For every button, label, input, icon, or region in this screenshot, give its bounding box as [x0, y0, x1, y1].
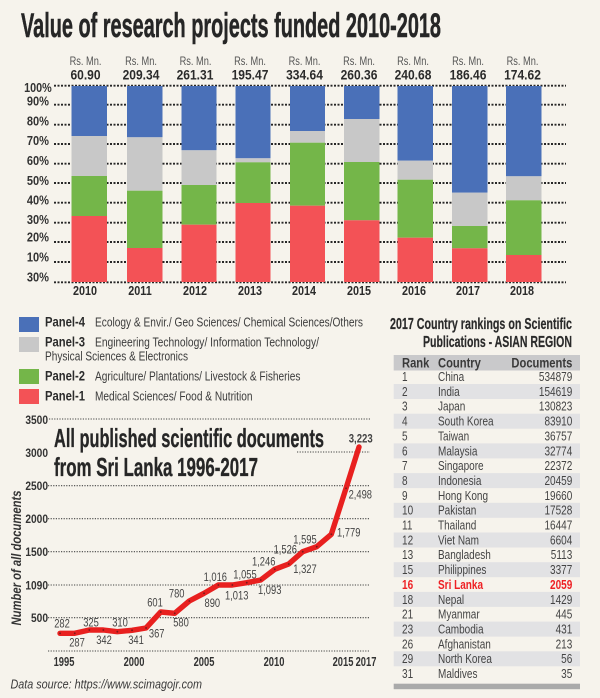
bar 2010: Rs. Mn.	[70, 55, 101, 68]
rankings table: 6	[402, 444, 408, 459]
rankings table: 11	[402, 518, 412, 533]
rankings table: 213	[556, 637, 572, 652]
legend: panel 4: Ecology & Envir./ Geo Sciences/ Chemical Sciences/Others	[95, 316, 363, 330]
rankings table: Nepal	[438, 593, 464, 607]
rankings table: Maldives	[438, 667, 478, 681]
legend: panel 1	[19, 389, 253, 404]
rankings table: Taiwan	[438, 429, 469, 444]
rankings table: 18	[402, 593, 413, 607]
rankings table: 5113	[551, 548, 572, 563]
rankings table: Malaysia	[438, 444, 478, 459]
highlighted row: Sri Lanka	[402, 578, 573, 592]
bar 2011: Rs. Mn.	[125, 55, 157, 68]
legend: panel 4	[19, 315, 363, 332]
rankings table: 3	[402, 399, 408, 414]
bar 2015	[341, 55, 380, 298]
y axis percentage labels: 70%	[27, 133, 49, 148]
rankings table: 20459	[544, 474, 572, 488]
rankings table heading	[390, 316, 572, 351]
bar 2013: 195.47	[232, 67, 268, 83]
rankings table: 15	[402, 563, 413, 577]
bar 2018: Rs. Mn.	[507, 55, 538, 68]
rankings table: Cambodia	[438, 622, 484, 637]
rankings table: 26	[402, 637, 413, 652]
rankings table: Thailand	[438, 518, 476, 533]
rankings table: 17528	[544, 503, 572, 518]
data point labels	[54, 433, 373, 650]
rankings table: Philippines	[438, 563, 487, 577]
data point labels: 1,055	[233, 568, 257, 582]
table header: Documents	[511, 355, 572, 371]
rankings table: 31	[402, 667, 413, 681]
legend: panel 1: Panel-1	[45, 389, 85, 404]
stacked bar chart: research funding by panel	[24, 55, 566, 298]
bar 2015: Rs. Mn.	[343, 55, 375, 68]
rankings table: South Korea	[438, 414, 494, 429]
y axis percentage labels: 30%	[27, 212, 49, 227]
rankings table: 29	[402, 652, 413, 667]
y axis percentage labels: 60%	[27, 153, 49, 168]
data point labels: 2,498	[349, 489, 372, 502]
rankings table: 23	[402, 622, 413, 637]
rankings table: 130823	[539, 399, 572, 414]
rankings table: 7	[402, 459, 408, 473]
rankings table: 5	[402, 429, 408, 444]
legend: panel 2: Panel-2	[45, 369, 85, 384]
bar 2014	[286, 55, 325, 298]
rankings table: 4	[402, 414, 408, 429]
bar 2013	[232, 55, 270, 298]
highlighted row: Sri Lanka: Sri Lanka	[438, 578, 484, 592]
table header: Country	[438, 355, 481, 371]
bar 2014: 334.64	[286, 67, 324, 83]
highlighted row: Sri Lanka: 2059	[550, 578, 573, 592]
rankings table: Afghanistan	[438, 637, 491, 652]
data point labels: 1,595	[293, 533, 317, 547]
highlighted row: Sri Lanka: 16	[402, 578, 414, 592]
bar 2013: Rs. Mn.	[234, 55, 266, 68]
data point labels: 282	[54, 618, 70, 631]
rankings table: Pakistan	[438, 503, 476, 518]
legend: panel 1: Medical Sciences/ Food & Nutrition	[95, 390, 253, 404]
data point labels: 580	[173, 617, 189, 630]
bar 2018: 174.62	[504, 67, 541, 83]
bar 2016: Rs. Mn.	[397, 55, 429, 68]
bar 2012: 261.31	[177, 67, 213, 83]
x axis year labels: 2017	[356, 656, 376, 669]
rankings table: 8	[402, 474, 408, 488]
data point labels: 890	[204, 597, 220, 610]
rankings table: 431	[556, 622, 572, 637]
y axis tick labels: 2500	[25, 480, 48, 493]
rankings table: 83910	[544, 414, 572, 429]
rankings table: China	[438, 370, 465, 384]
y axis percentage labels: 50%	[27, 173, 49, 188]
red data line	[60, 447, 359, 633]
y axis tick labels: 2000	[25, 513, 48, 526]
y axis percentage labels: 40%	[27, 193, 49, 208]
data point labels: 1,526	[274, 544, 297, 557]
rankings table: 2	[402, 385, 408, 399]
rankings table: 12	[402, 533, 413, 548]
data point labels: 1,779	[337, 527, 360, 540]
bar 2016: 2016	[402, 283, 426, 298]
y axis percentage labels: 20%	[27, 230, 49, 245]
bar 2013: 2013	[238, 283, 262, 298]
bar 2010: 2010	[73, 283, 97, 298]
bar 2015: 260.36	[341, 67, 377, 83]
rankings table: 1	[402, 370, 408, 384]
line chart: published documents	[8, 414, 376, 669]
x axis year labels: 1995	[54, 656, 74, 669]
rankings table: Bangladesh	[438, 548, 491, 563]
legend: panel 2	[19, 369, 300, 384]
table header	[394, 355, 580, 371]
y axis tick labels: 3000	[25, 447, 48, 460]
bar 2016: 240.68	[395, 67, 431, 83]
data point labels: 601	[147, 597, 163, 610]
rankings table: Hong Kong	[438, 489, 488, 503]
rankings table: 154619	[539, 385, 572, 399]
data point labels: 1,246	[252, 556, 275, 569]
data point labels: 287	[69, 637, 85, 650]
chart title	[54, 423, 324, 482]
bar 2014: 2014	[292, 283, 316, 298]
y axis percentage labels: 80%	[27, 114, 49, 129]
y axis percentage labels: 100%	[24, 80, 52, 95]
rankings table: 19660	[544, 489, 572, 503]
bar 2015: 2015	[347, 283, 371, 298]
bar 2012: 2012	[183, 283, 207, 298]
data point labels: 367	[149, 628, 165, 641]
chart title: All published scientific documents	[54, 423, 324, 453]
y axis tick labels: 500	[31, 612, 48, 625]
rankings table: Myanmar	[438, 607, 480, 622]
y axis percentage labels: 30%	[27, 270, 49, 285]
bar 2010: 60.90	[70, 67, 101, 83]
rankings table	[394, 355, 580, 689]
legend: panel 3: Panel-3	[45, 335, 85, 350]
rankings table: 6604	[550, 533, 573, 548]
y axis tick labels: 1500	[25, 546, 48, 559]
bar 2018: 2018	[510, 283, 534, 298]
table header: Rank	[402, 355, 430, 371]
y axis tick labels: 1090	[25, 580, 48, 593]
y axis percentage labels: 90%	[27, 94, 49, 109]
rankings table: 534879	[539, 370, 572, 384]
bar 2011: 209.34	[123, 67, 160, 83]
bar 2017: 186.46	[450, 67, 486, 83]
legend: panel 3: Engineering Technology/ Information Technology/	[95, 336, 319, 350]
bar 2011	[123, 55, 162, 298]
data point labels: 341	[128, 634, 144, 647]
legend: panel 3	[19, 335, 319, 364]
bar 2017: Rs. Mn.	[452, 55, 484, 68]
bar 2011: 2011	[128, 283, 152, 298]
bar 2012: Rs. Mn.	[180, 55, 211, 68]
rankings table: 56	[561, 652, 572, 667]
data point labels: 325	[83, 617, 99, 630]
data point labels: 1,093	[258, 584, 281, 597]
rankings table: 1429	[550, 593, 572, 607]
bar 2018	[504, 55, 542, 298]
data point labels: 1,013	[225, 589, 248, 603]
bar 2016	[395, 55, 433, 298]
x axis year labels: 2015	[333, 656, 353, 669]
data point labels: 342	[96, 634, 112, 647]
rankings table: Singapore	[438, 459, 484, 473]
legend: panel 4: Panel-4	[45, 315, 85, 330]
rankings table: 22372	[544, 459, 572, 473]
x axis year labels	[54, 656, 376, 669]
rankings table: North Korea	[438, 652, 492, 667]
x axis year labels: 2000	[124, 656, 144, 669]
bar 2017	[450, 55, 488, 298]
rankings table: 445	[556, 607, 572, 622]
rankings table: 35	[561, 667, 572, 681]
legend	[19, 315, 363, 404]
data point labels: 1,327	[293, 563, 317, 576]
rankings table: Viet Nam	[438, 533, 479, 548]
rankings table: 13	[402, 548, 413, 563]
rankings table: 21	[402, 607, 413, 622]
data source: Data source: https://www.scimagojr.com	[10, 678, 202, 692]
rankings table: Indonesia	[438, 474, 482, 488]
data point labels: 3,223	[349, 433, 373, 446]
rankings table: 32774	[544, 444, 573, 459]
x axis year labels: 2010	[264, 656, 284, 669]
bar 2014: Rs. Mn.	[289, 55, 320, 68]
data point labels: 1,016	[204, 571, 227, 584]
bar 2017: 2017	[456, 283, 480, 298]
legend: panel 2: Agriculture/ Plantations/ Livestock & Fisheries	[95, 370, 300, 384]
y axis tick labels: 3500	[25, 414, 48, 427]
rankings table: 3377	[550, 563, 572, 577]
rankings table: India	[438, 385, 460, 399]
x axis year labels: 2005	[194, 656, 214, 669]
rankings table: 16447	[544, 518, 572, 533]
rankings table: Japan	[438, 399, 465, 414]
legend: panel 3: Physical Sciences & Electronics	[45, 350, 188, 364]
rankings table: 9	[402, 489, 408, 503]
chart title: from Sri Lanka 1996-2017	[54, 452, 258, 482]
y axis percentage labels: 10%	[27, 250, 49, 265]
data point labels: 780	[169, 588, 185, 601]
y axis percentage labels	[24, 80, 52, 285]
y axis title: Number of all documents	[8, 490, 24, 626]
bar 2010	[70, 55, 107, 298]
y axis tick labels	[25, 414, 48, 625]
bar 2012	[177, 55, 216, 298]
data point labels: 310	[112, 617, 128, 630]
rankings table: 36757	[544, 429, 572, 444]
rankings table: 10	[402, 503, 413, 518]
